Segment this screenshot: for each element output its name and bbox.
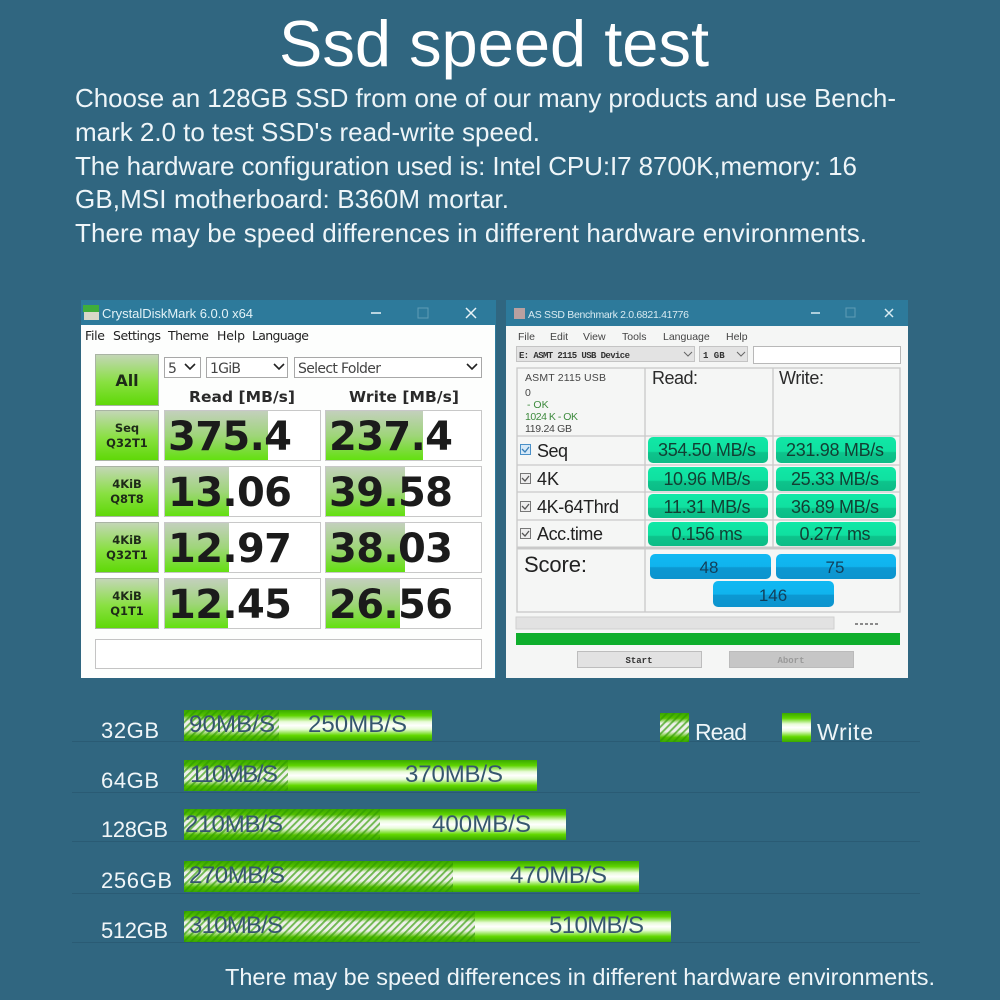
legend: Write bbox=[817, 719, 873, 745]
menu bar: File bbox=[85, 328, 105, 343]
menu bar: Help bbox=[217, 328, 245, 343]
row: 4KiB Q8T8: 13.06 bbox=[168, 470, 292, 516]
write result pills: 0.277 ms bbox=[800, 524, 870, 544]
menu bar: Help bbox=[726, 331, 748, 343]
test labels with checkboxes bbox=[520, 441, 619, 544]
chart: capacity speed bars bbox=[72, 710, 920, 943]
window frame and title bar bbox=[81, 300, 496, 678]
window title: CrystalDiskMark 6.0.0 x64 bbox=[102, 306, 253, 321]
bar: 32GB: 90MB/S bbox=[189, 711, 275, 738]
bar: 64GB: 64GB bbox=[101, 768, 159, 793]
row: 4KiB Q8T8: 4KiB bbox=[112, 477, 142, 491]
dropdown labels: 1GiB bbox=[210, 361, 241, 377]
row: 4KiB Q1T1: Q1T1 bbox=[110, 604, 144, 618]
menu bar: Settings bbox=[113, 328, 161, 343]
bar: 64GB: 110MB/S bbox=[190, 761, 278, 788]
dropdown labels: Select Folder bbox=[298, 361, 381, 377]
window title: AS SSD Benchmark 2.0.6821.41776 bbox=[528, 309, 689, 321]
score bbox=[524, 552, 896, 607]
menu bar: Edit bbox=[550, 331, 568, 343]
dropdowns bbox=[164, 358, 482, 378]
write result pills bbox=[776, 437, 896, 546]
bar: 64GB bbox=[101, 760, 537, 793]
drive info: 1024 K - OK bbox=[525, 411, 578, 423]
read result pills: 354.50 MB/s bbox=[658, 440, 756, 460]
read result pills: 11.31 MB/s bbox=[664, 497, 750, 517]
legend bbox=[660, 713, 873, 745]
bar: 512GB bbox=[101, 911, 671, 943]
row: 4KiB Q32T1: 4KiB bbox=[112, 533, 142, 547]
dropdown labels bbox=[168, 361, 381, 377]
intro text block: Choose an 128GB SSD from one of our many products and use Bench- bbox=[75, 83, 896, 113]
legend: Read bbox=[695, 719, 747, 745]
write result pills: 25.33 MB/s bbox=[791, 469, 879, 489]
column headings: Read: bbox=[652, 368, 698, 388]
drive info: ASMT 2115 USB bbox=[525, 372, 606, 384]
window controls bbox=[371, 308, 476, 318]
bar: 64GB: 370MB/S bbox=[405, 761, 503, 788]
row: Seq bbox=[96, 410, 482, 460]
comment box bbox=[96, 640, 482, 668]
menu bar: Language bbox=[663, 331, 710, 343]
dropdown labels: 5 bbox=[168, 361, 177, 377]
test labels with checkboxes: 4K bbox=[537, 469, 559, 489]
column headings: Read [MB/s] bbox=[189, 388, 295, 406]
bar: 128GB: 210MB/S bbox=[185, 811, 283, 838]
row: 4KiB Q32T1 bbox=[96, 522, 482, 572]
column headings bbox=[652, 368, 824, 388]
column headings bbox=[189, 388, 459, 406]
intro text block: The hardware configuration used is: Intel CPU:I7 8700K,memory: 16 bbox=[75, 151, 857, 181]
icon: AS SSD bbox=[514, 308, 525, 319]
row: Seq: 375.4 bbox=[168, 414, 292, 460]
row: Seq: Q32T1 bbox=[106, 436, 148, 450]
progress bars bbox=[516, 617, 900, 645]
row: 4KiB Q8T8 bbox=[96, 466, 482, 516]
menu bar: Theme bbox=[167, 328, 209, 343]
drive info: 119.24 GB bbox=[525, 423, 572, 435]
row: 4KiB Q32T1: 38.03 bbox=[329, 526, 453, 572]
column headings: Write [MB/s] bbox=[349, 388, 459, 406]
bar: 256GB: 270MB/S bbox=[189, 862, 285, 889]
icon: CrystalDiskMark disk bbox=[83, 305, 99, 320]
bar: 128GB: 400MB/S bbox=[432, 811, 531, 838]
menu bar: File bbox=[518, 331, 535, 343]
drive info: 0 bbox=[525, 387, 531, 399]
score: 146 bbox=[759, 586, 787, 605]
read result pills bbox=[648, 437, 768, 546]
bar: 256GB: 470MB/S bbox=[510, 862, 607, 889]
drive selector bbox=[516, 346, 900, 364]
footer note: There may be speed differences in different hardware environments. bbox=[225, 964, 935, 990]
bar: 256GB bbox=[101, 861, 639, 893]
test labels with checkboxes: 4K-64Thrd bbox=[537, 497, 619, 517]
menu bar bbox=[518, 331, 748, 343]
row: 4KiB Q1T1 bbox=[96, 578, 482, 628]
test labels with checkboxes: Seq bbox=[537, 441, 568, 461]
score: 75 bbox=[826, 558, 844, 577]
row: Seq: 237.4 bbox=[329, 414, 453, 460]
menu bar: View bbox=[583, 331, 606, 343]
row: 4KiB Q8T8: 39.58 bbox=[329, 470, 453, 516]
write result pills: 231.98 MB/s bbox=[786, 440, 884, 460]
Start and Abort buttons: Abort bbox=[777, 656, 805, 666]
drive info: - OK bbox=[527, 399, 549, 411]
drive selector: 1 GB bbox=[703, 351, 725, 361]
Start and Abort buttons: Start bbox=[625, 656, 653, 666]
intro text block bbox=[75, 83, 896, 248]
row: Seq: Seq bbox=[115, 421, 139, 435]
score: 48 bbox=[700, 558, 718, 577]
panel: CrystalDiskMark window bbox=[81, 300, 496, 678]
menu bar: Language bbox=[252, 328, 309, 343]
bar: 512GB: 510MB/S bbox=[549, 912, 644, 939]
All button: All bbox=[115, 371, 139, 390]
row: 4KiB Q1T1: 12.45 bbox=[168, 582, 292, 628]
drive info bbox=[525, 372, 606, 435]
All button bbox=[96, 354, 158, 406]
test labels with checkboxes: Acc.time bbox=[537, 524, 603, 544]
bar: 32GB: 32GB bbox=[101, 718, 159, 743]
bar: 512GB: 512GB bbox=[101, 918, 168, 943]
bar: 256GB: 256GB bbox=[101, 868, 172, 893]
bar: 512GB: 310MB/S bbox=[189, 912, 283, 939]
row: 4KiB Q32T1: 12.97 bbox=[168, 526, 292, 572]
intro text block: mark 2.0 to test SSD's read-write speed. bbox=[75, 117, 540, 147]
row: 4KiB Q8T8: Q8T8 bbox=[110, 492, 144, 506]
read result pills: 0.156 ms bbox=[672, 524, 742, 544]
row: 4KiB Q1T1: 4KiB bbox=[112, 589, 142, 603]
window controls bbox=[811, 308, 893, 317]
results table grid bbox=[517, 368, 900, 612]
title: Ssd speed test bbox=[279, 7, 709, 80]
row: 4KiB Q1T1: 26.56 bbox=[329, 582, 453, 628]
menu bar bbox=[85, 328, 309, 343]
panel: AS SSD Benchmark window bbox=[506, 300, 908, 678]
column headings: Write: bbox=[779, 368, 824, 388]
score: Score: bbox=[524, 552, 587, 577]
row: 4KiB Q32T1: Q32T1 bbox=[106, 548, 148, 562]
write result pills: 36.89 MB/s bbox=[791, 497, 879, 517]
window frame and title bar bbox=[506, 300, 908, 678]
menu bar: Tools bbox=[622, 331, 647, 343]
drive selector: E: ASMT 2115 USB Device bbox=[519, 351, 630, 361]
bar: 32GB bbox=[101, 710, 432, 743]
intro text block: There may be speed differences in different hardware environments. bbox=[75, 218, 867, 248]
read result pills: 10.96 MB/s bbox=[664, 469, 750, 489]
bar: 32GB: 250MB/S bbox=[308, 711, 407, 738]
bar: 128GB: 128GB bbox=[101, 817, 168, 842]
bar: 128GB bbox=[101, 809, 566, 842]
Start and Abort buttons bbox=[578, 652, 854, 668]
intro text block: GB,MSI motherboard: B360M mortar. bbox=[75, 184, 509, 214]
